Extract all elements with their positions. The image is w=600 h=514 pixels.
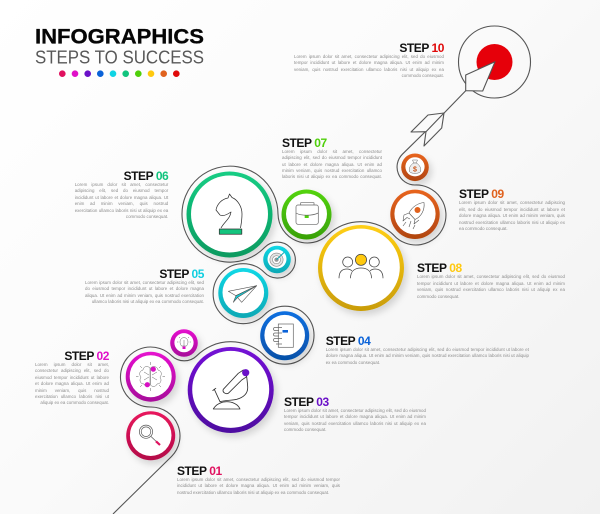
step 04 text: dolore magna aliqua. Ut enim ad minim veniam, quis nostrud exercitation ullamco laboris nisi ut aliquip bbox=[326, 353, 529, 358]
icon: people bbox=[339, 254, 383, 278]
step 03 circle: microscope bbox=[188, 347, 274, 433]
step 10 text bbox=[294, 40, 444, 78]
step 06 text: exercitation ullamco laboris nisi ut aliquip ex ea bbox=[75, 208, 168, 213]
step 01 text bbox=[177, 464, 340, 495]
small target circle bbox=[263, 246, 291, 273]
step 05 text: STEP 05 bbox=[159, 267, 204, 281]
arrow bbox=[411, 62, 495, 146]
step 09 circle: rocket bbox=[390, 190, 440, 239]
step 09 text: ea commodo consequat. bbox=[459, 226, 508, 231]
step 03 text: commodo consequat. bbox=[284, 427, 326, 432]
step 02 text: aliquip ex ea commodo consequat. bbox=[40, 400, 109, 405]
step 07 text: Lorem ipsum dolor sit amet, consectetur bbox=[282, 149, 382, 154]
step 04 text: STEP 04 bbox=[326, 334, 370, 348]
colour dots row bbox=[59, 70, 180, 77]
step 09 text: dolore magna aliqua. Ut enim ad minim veniam, quis bbox=[459, 213, 565, 218]
step 06 text: commodo consequat. bbox=[126, 214, 168, 219]
step 04 circle: notebook bbox=[260, 311, 309, 360]
step 01 circle: magnifier bbox=[126, 411, 175, 460]
money bag circle bbox=[401, 154, 429, 181]
step 08 text: STEP 08 bbox=[417, 261, 462, 275]
title: INFOGRAPHICS bbox=[35, 25, 204, 48]
step 08 text bbox=[417, 261, 565, 299]
step 09 text: STEP 09 bbox=[459, 187, 504, 201]
step 03 text: Lorem ipsum dolor sit amet, consectetur adipiscing elit, sed do eiusmod bbox=[284, 408, 426, 413]
step 02 text: consectetur adipiscing elit, sed do bbox=[35, 368, 109, 373]
target circle bbox=[458, 26, 530, 98]
step 01 text: incididunt ut labore et dolore magna aliqua. Ut enim ad minim veniam, quis bbox=[177, 483, 340, 488]
step 01 text: STEP 01 bbox=[177, 464, 222, 478]
icon: paper plane bbox=[228, 286, 257, 302]
step 02 text: exercitation ullamco laboris nisi ut bbox=[35, 394, 109, 399]
step 01 text: nostrud exercitation ullamco laboris nisi ut aliquip ex ea commodo consequat. bbox=[177, 490, 329, 495]
bulb circle bbox=[170, 329, 198, 357]
step 10 text: Lorem ipsum dolor sit amet, consectetur adipiscing elit, sed do eiusmod bbox=[294, 54, 444, 59]
icon: notebook bbox=[274, 324, 293, 347]
step 05 text: do eiusmod tempor incididunt ut labore et dolore magna bbox=[85, 286, 204, 291]
step 07 text: adipiscing elit, sed do eiusmod tempor incididunt bbox=[282, 155, 382, 160]
step 07 circle: briefcase bbox=[282, 190, 332, 240]
winding path bbox=[113, 131, 446, 514]
step 06 text: adipiscing elit, sed do eiusmod tempor bbox=[75, 188, 168, 193]
step 06 text: incididunt ut labore et dolore magna aliqua. Ut bbox=[75, 195, 168, 200]
step 06 text: STEP 06 bbox=[124, 169, 168, 183]
step 02 text: Lorem ipsum dolor sit amet, bbox=[35, 362, 109, 367]
step 07 text: ut labore et dolore magna aliqua. Ut enim ad bbox=[282, 162, 382, 167]
step 04 text: Lorem ipsum dolor sit amet, consectetur adipiscing elit, sed do eiusmod tempor incididunt ut labore et bbox=[326, 347, 529, 352]
title bbox=[35, 25, 204, 67]
icon: bulb bbox=[177, 337, 191, 349]
step 05 text: ullamco laboris nisi ut aliquip ex ea commodo consequat. bbox=[92, 299, 204, 304]
step 05 text: Lorem ipsum dolor sit amet, consectetur adipiscing elit, sed bbox=[85, 280, 204, 285]
step 07 text: minim veniam, quis nostrud exercitation ullamco bbox=[282, 168, 382, 173]
step 04 text: ex ea commodo consequat. bbox=[326, 360, 380, 365]
step 08 circle: people bbox=[318, 225, 404, 311]
step 07 text bbox=[282, 136, 382, 179]
step 07 text: laboris nisi ut aliquip ex ea commodo consequat. bbox=[282, 174, 382, 179]
step 02 text: et dolore magna aliqua. Ut enim ad bbox=[35, 381, 109, 386]
step 03 text bbox=[284, 394, 426, 432]
step 05 circle: paper plane bbox=[218, 268, 268, 318]
icon: briefcase bbox=[296, 203, 318, 224]
title: STEPS TO SUCCESS bbox=[35, 47, 204, 67]
step 09 text: Lorem ipsum dolor sit amet, consectetur adipiscing bbox=[459, 200, 565, 205]
step 04 text bbox=[326, 334, 529, 365]
step 08 text: commodo consequat. bbox=[417, 294, 459, 299]
step 10 text: tempor incididunt ut labore et dolore magna aliqua. Ut enim ad minim bbox=[294, 60, 444, 65]
step 05 text: aliqua. Ut enim ad minim veniam, quis nostrud exercitation bbox=[85, 293, 204, 298]
icon: brain bbox=[136, 362, 165, 391]
step 09 text bbox=[459, 187, 565, 231]
step 02 text: STEP 02 bbox=[64, 349, 109, 363]
icon: magnifier bbox=[139, 425, 160, 445]
step 06 text: Lorem ipsum dolor sit amet, consectetur bbox=[75, 182, 168, 187]
step 03 text: veniam, quis nostrud exercitation ullamco laboris nisi ut aliquip ex ea bbox=[284, 421, 426, 426]
step 03 text: STEP 03 bbox=[284, 394, 329, 408]
step 08 text: Lorem ipsum dolor sit amet, consectetur adipiscing elit, sed do eiusmod bbox=[417, 274, 565, 279]
step 03 text: tempor incididunt ut labore et dolore magna aliqua. Ut enim ad minim bbox=[284, 414, 426, 419]
step 02 text bbox=[35, 349, 109, 405]
step 02 circle: brain bbox=[126, 352, 176, 402]
icon: rocket bbox=[403, 202, 424, 229]
step 05 text bbox=[85, 267, 204, 304]
icon: money bag: $ bbox=[413, 166, 417, 174]
step 01 text: Lorem ipsum dolor sit amet, consectetur adipiscing elit, sed do eiusmod tempor bbox=[177, 477, 340, 482]
step 06 circle: chess knight bbox=[186, 172, 272, 258]
step 02 text: minim veniam, quis nostrud bbox=[35, 388, 109, 393]
icon: small target bbox=[270, 252, 284, 266]
step 06 text bbox=[74, 169, 168, 219]
step 08 text: tempor incididunt ut labore et dolore magna aliqua. Ut enim ad minim bbox=[417, 281, 565, 286]
icon: microscope bbox=[213, 369, 249, 409]
step 10 text: STEP 10 bbox=[399, 40, 444, 54]
step 06 text: enim ad minim veniam, quis nostrud bbox=[75, 201, 168, 206]
step 09 text: elit, sed do eiusmod tempor incididunt ut labore et bbox=[459, 207, 565, 212]
step 10 text: commodo consequat. bbox=[402, 73, 444, 78]
step 09 text: nostrud exercitation ullamco laboris nisi ut aliquip ex bbox=[459, 220, 565, 225]
step 02 text: eiusmod tempor incididunt ut labore bbox=[35, 375, 109, 380]
step 07 text: STEP 07 bbox=[282, 136, 327, 150]
step 08 text: veniam, quis nostrud exercitation ullamco laboris nisi ut aliquip ex ea bbox=[417, 287, 565, 292]
icon: chess knight bbox=[216, 194, 242, 234]
step 10 text: veniam, quis nostrud exercitation ullamco laboris nisi ut aliquip ex ea bbox=[294, 67, 444, 72]
